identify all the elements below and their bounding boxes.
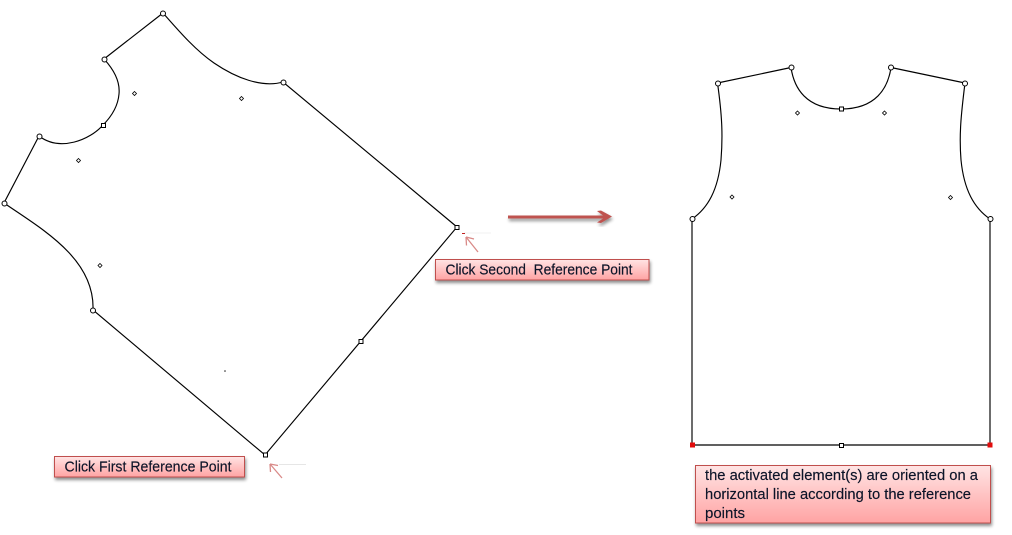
callout: result explanation: horizontal line according to the reference <box>705 486 971 503</box>
rotated garment pattern (before) <box>2 11 459 457</box>
oriented outline vertices <box>690 65 993 448</box>
oriented inner markers <box>730 111 952 200</box>
callout: result explanation: points <box>705 505 745 522</box>
rotated outline <box>4 13 457 455</box>
pointer: first reference point <box>270 464 306 478</box>
callout: click second reference point: Click Second Reference Point <box>446 262 633 278</box>
rotated outline vertices <box>2 11 459 457</box>
red reference points <box>690 442 992 448</box>
rotated inner markers <box>76 92 244 268</box>
oriented outline <box>692 68 990 445</box>
callout: result explanation: the activated element(s) are oriented on a <box>705 467 979 484</box>
block arrow pointing right <box>508 210 612 223</box>
callout: click first reference point: Click First Reference Point <box>64 458 232 476</box>
callout: result explanation <box>696 466 990 523</box>
pointer: second reference point <box>462 233 491 252</box>
oriented garment pattern (after) <box>690 65 993 448</box>
